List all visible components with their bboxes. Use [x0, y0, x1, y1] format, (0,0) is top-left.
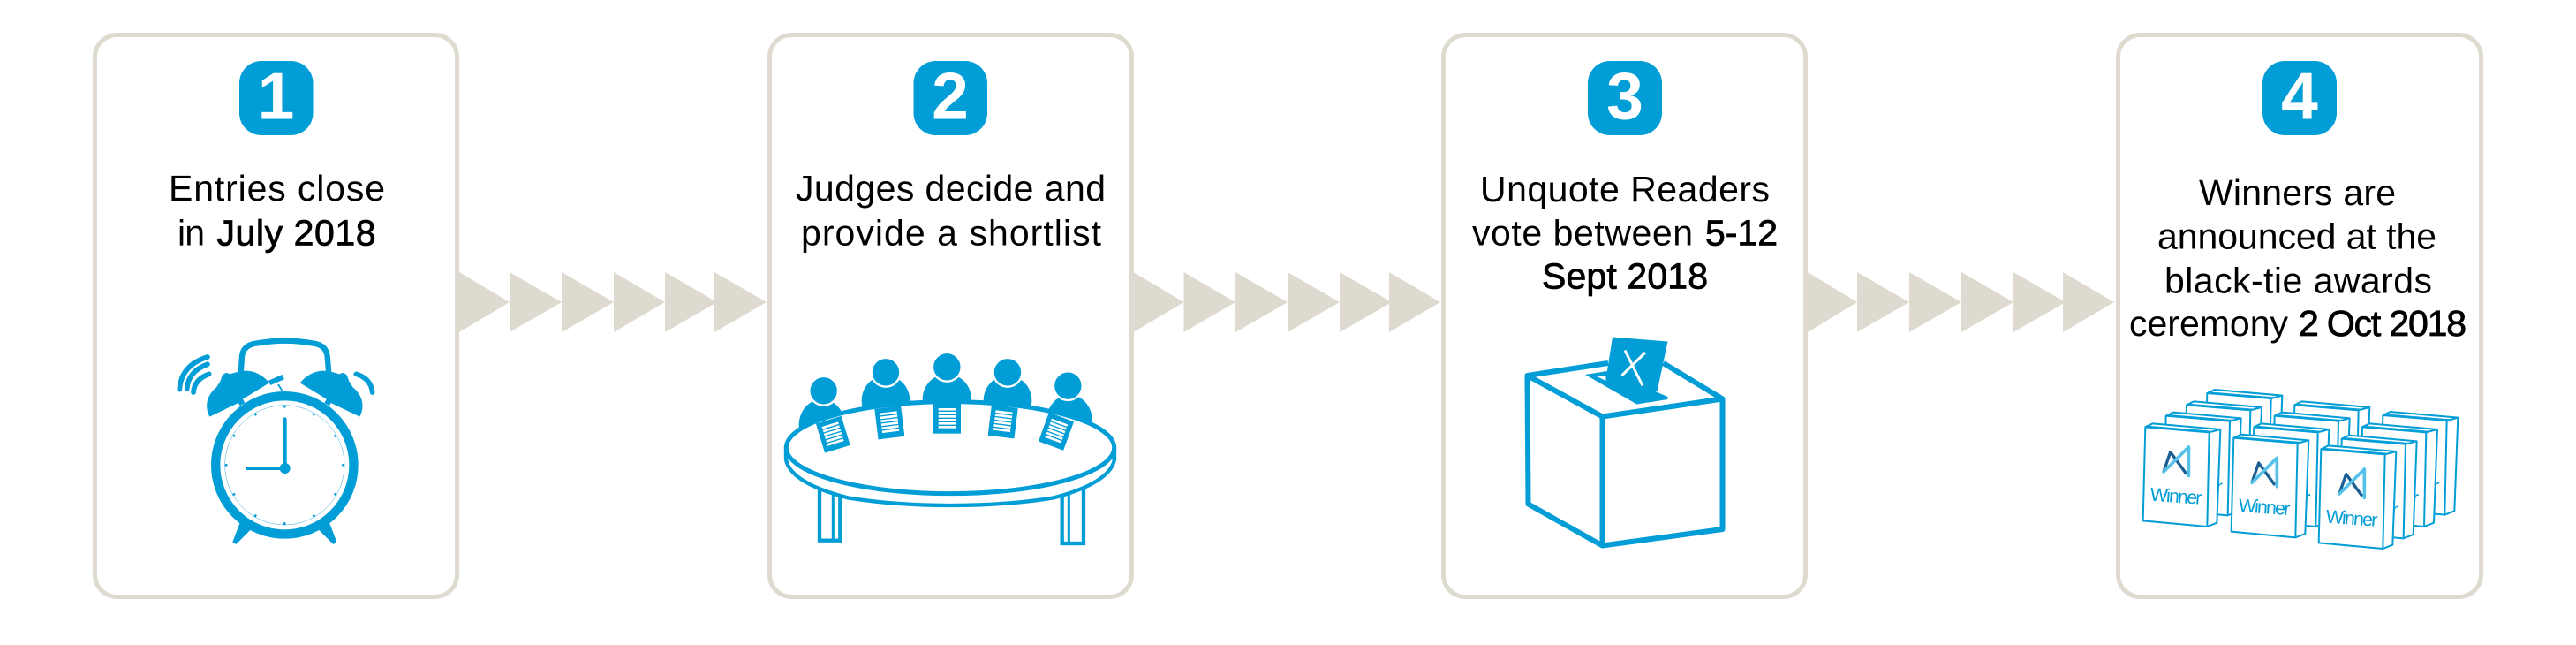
step 4 text: black-tie awards	[2164, 260, 2432, 300]
step 4 text: announced at the	[2157, 216, 2436, 256]
panel border	[95, 35, 457, 597]
panel border	[1443, 35, 1805, 597]
number badge 1: 1	[258, 58, 294, 133]
arrows: step 2 to 3	[1134, 272, 1440, 332]
panel: step 3	[1443, 35, 1805, 597]
step 1 text	[169, 168, 385, 253]
step 3 text: 5-12	[1705, 212, 1778, 253]
step 4 text: 2 Oct 2018	[2299, 303, 2466, 344]
arrows: step 3 to 4	[1808, 272, 2114, 332]
step 2 text	[796, 168, 1106, 253]
panel: step 1	[95, 35, 457, 597]
number badge 1	[239, 58, 313, 135]
number badge 4: 4	[2281, 58, 2318, 133]
step 1 text: Entries close	[169, 168, 385, 209]
step 4 text: ceremony	[2129, 303, 2289, 344]
step 3 text	[1472, 169, 1778, 297]
step 2 text: provide a shortlist	[801, 212, 1102, 253]
icon: ballot box	[1528, 338, 1722, 546]
number badge 4	[2262, 58, 2337, 135]
icon: judges around a table	[786, 353, 1114, 543]
step 1 text: in	[178, 212, 205, 253]
step 3 text: Sept 2018	[1542, 256, 1708, 297]
icon: alarm clock	[179, 341, 373, 544]
step 1 text: July 2018	[217, 212, 376, 253]
step 4 text: Winners are	[2199, 172, 2396, 213]
panel border	[770, 35, 1132, 597]
panel: step 2	[770, 35, 1132, 597]
panel border	[2118, 35, 2482, 597]
step 2 text: Judges decide and	[796, 168, 1106, 209]
step 3 text: vote between	[1472, 212, 1693, 253]
step 3 text: Unquote Readers	[1480, 169, 1770, 209]
panel: step 4	[2118, 35, 2482, 597]
icon: winner trophies	[2143, 390, 2458, 549]
number badge 2: 2	[932, 58, 969, 133]
step 4 text	[2129, 172, 2466, 344]
number badge 2	[913, 58, 987, 135]
number badge 3: 3	[1606, 58, 1643, 133]
number badge 3	[1588, 58, 1662, 135]
arrows: step 1 to 2	[459, 272, 767, 332]
